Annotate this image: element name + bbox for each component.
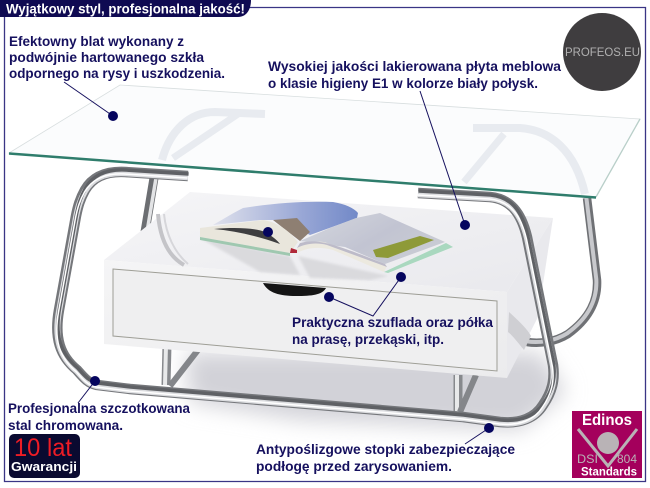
cabinet top shelf: [104, 192, 553, 292]
callout: drawer and shelf: na prasę, przekąski, itp.: [292, 332, 444, 347]
callout: lacquered board: Wysokiej jakości lakierowana płyta meblowa: [268, 59, 562, 74]
callout: chrome steel: [8, 376, 190, 433]
callout: glass top: podwójnie hartowanego szkła: [9, 50, 204, 65]
glass table top: [9, 85, 640, 198]
magazine on shelf: [200, 202, 453, 280]
cabinet front: [104, 260, 507, 378]
frame seen through glass, right: [464, 128, 585, 194]
logo: Profeos.eu: [563, 13, 641, 91]
callout: lacquered board: o klasie higieny E1 w kolorze biały połysk.: [268, 76, 538, 91]
glass right edge: [596, 119, 640, 197]
badge: 10 year warranty: Gwarancji: [11, 459, 77, 474]
cabinet right side: [507, 218, 553, 378]
logo: Profeos.eu: PROFEOS.EU: [565, 45, 640, 59]
callout: drawer and shelf: [292, 272, 493, 347]
callout: anti-slip feet: podłogę przed zarysowaniem.: [256, 459, 452, 474]
drawer handle cut-out: [263, 283, 326, 296]
shelf reflection of tube: [158, 214, 184, 265]
badge: 10 year warranty: [9, 434, 80, 478]
glass front green edge: [9, 154, 596, 198]
table: rear frame tubes and legs: [145, 178, 597, 412]
badge: Edinos Standards: DSI: [577, 452, 598, 466]
badge: 10 year warranty: 10 lat: [14, 434, 72, 462]
header title: Wyjątkowy styl, profesjonalna jakość!: [6, 1, 245, 16]
badge: Edinos Standards: 804: [617, 452, 637, 466]
callout: anti-slip feet: [256, 423, 515, 474]
badge: Edinos Standards: Edinos: [582, 412, 632, 429]
badge: Edinos Standards: [572, 411, 642, 478]
callout: drawer and shelf: Praktyczna szuflada oraz półka: [292, 315, 493, 330]
callout: glass top: Efektowny blat wykonany z: [9, 34, 184, 49]
callout: lacquered board: [268, 59, 562, 230]
badge: Edinos Standards: Standards: [581, 464, 637, 478]
marker: magazine: [263, 227, 273, 237]
drawer cabinet: [104, 192, 553, 378]
callout: glass top: odpornego na rysy i uszkodzenia.: [9, 66, 225, 81]
callout: chrome steel: stal chromowana.: [8, 418, 123, 433]
frame seen through glass, left: [162, 112, 265, 160]
drawer front outline: [113, 269, 497, 371]
floor shadow: [185, 352, 566, 430]
callout: chrome steel: Profesjonalna szczotkowana: [8, 401, 190, 416]
table: front frame tube: [57, 170, 554, 424]
callout: glass top: [9, 34, 225, 121]
header banner: [0, 0, 251, 17]
callout: anti-slip feet: Antypoślizgowe stopki zabezpieczające: [256, 442, 515, 457]
